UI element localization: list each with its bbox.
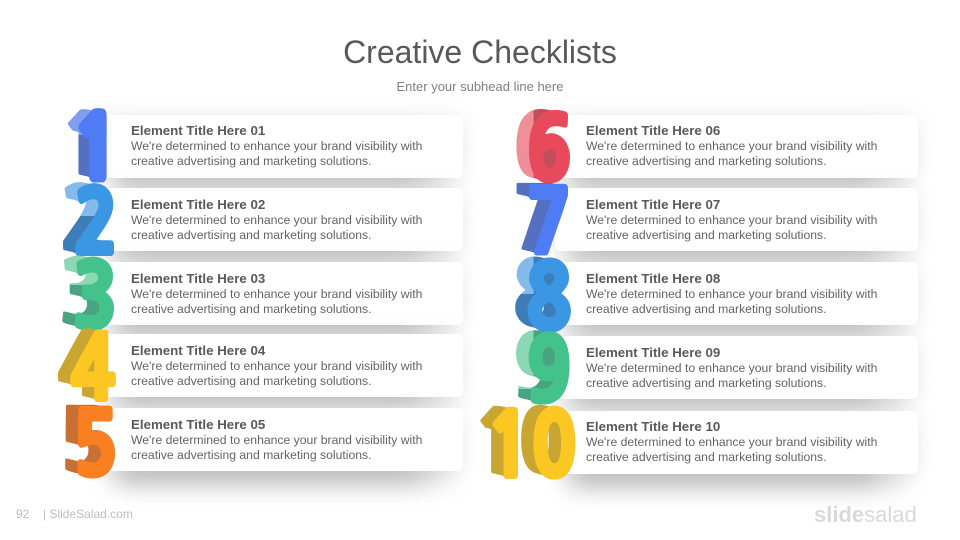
- panel: element 05: creative advertising and marketing solutions.: [131, 448, 372, 462]
- icon: 3D number 8: 8: [527, 255, 571, 341]
- icon: 3D number 7: 7: [527, 180, 571, 266]
- panel: element 01: Element Title Here 01: [131, 123, 265, 138]
- icon: 3D number 4: 4: [71, 326, 115, 412]
- panel: element 08: [555, 262, 918, 325]
- panel: element 03: [100, 262, 463, 325]
- panel: element 02: We're determined to enhance your brand visibility with: [131, 213, 422, 227]
- title: Creative Checklists: [343, 34, 617, 70]
- icon: 3D number 9: 9: [527, 328, 571, 414]
- icon: 3D number 10: 10: [487, 403, 576, 489]
- panel: element 09: [555, 336, 918, 399]
- footer site name: | SlideSalad.com: [43, 507, 133, 521]
- panel: element 01: [100, 115, 463, 178]
- panel: element 06: We're determined to enhance your brand visibility with: [586, 139, 877, 153]
- panel: element 01: We're determined to enhance your brand visibility with: [131, 139, 422, 153]
- panel: element 02: creative advertising and marketing solutions.: [131, 228, 372, 242]
- panel: element 04: We're determined to enhance your brand visibility with: [131, 359, 422, 373]
- panel: element 03: Element Title Here 03: [131, 271, 265, 286]
- icon: 3D number 5: 5: [73, 402, 117, 488]
- panel: element 02: [100, 188, 463, 251]
- panel: element 05: Element Title Here 05: [131, 417, 265, 432]
- panel: element 08: Element Title Here 08: [586, 271, 720, 286]
- subhead: Enter your subhead line here: [397, 79, 563, 94]
- panel: element 09: Element Title Here 09: [586, 345, 720, 360]
- panel: element 09: creative advertising and marketing solutions.: [586, 376, 826, 390]
- icon: 3D number 5: 5: [73, 402, 117, 488]
- icon: 3D number 2: 2: [74, 180, 118, 266]
- panel: element 09: We're determined to enhance your brand visibility with: [586, 361, 877, 375]
- panel: element 05: [100, 408, 463, 471]
- icon: 3D number 1: 1: [75, 107, 118, 191]
- page number: 92: [16, 507, 29, 521]
- icon: 3D number 1: 1: [75, 107, 118, 191]
- icon: 3D number 9: 9: [527, 328, 571, 414]
- icon: 3D number 2: 2: [74, 180, 118, 266]
- panel: element 03: creative advertising and marketing solutions.: [131, 302, 372, 316]
- icon: 3D number 7: 7: [527, 180, 571, 266]
- panel: element 02: Element Title Here 02: [131, 197, 265, 212]
- icon: 3D number 3: 3: [73, 254, 117, 340]
- panel: element 07: creative advertising and marketing solutions.: [586, 228, 826, 242]
- icon: 3D number 3: 3: [73, 254, 117, 340]
- panel: element 03: We're determined to enhance your brand visibility with: [131, 287, 422, 301]
- panel: element 06: Element Title Here 06: [586, 123, 720, 138]
- icon: 3D number 6: 6: [527, 107, 571, 193]
- panel: element 10: Element Title Here 10: [586, 419, 720, 434]
- icon: 3D number 6: 6: [527, 107, 571, 193]
- icon: 3D number 10: 10: [487, 403, 576, 489]
- panel: element 07: We're determined to enhance your brand visibility with: [586, 213, 877, 227]
- icon: 3D number 1: 1: [75, 107, 118, 191]
- panel: element 06: creative advertising and marketing solutions.: [586, 154, 826, 168]
- panel: element 04: [100, 334, 463, 397]
- panel: element 04: creative advertising and marketing solutions.: [131, 374, 372, 388]
- panel: element 08: We're determined to enhance your brand visibility with: [586, 287, 877, 301]
- icon: 3D number 8: 8: [527, 255, 571, 341]
- icon: 3D number 2: 2: [74, 180, 118, 266]
- panel: element 10: We're determined to enhance your brand visibility with: [586, 435, 877, 449]
- panel: element 07: Element Title Here 07: [586, 197, 720, 212]
- panel: element 10: [555, 411, 918, 474]
- icon: 3D number 6: 6: [527, 107, 571, 193]
- panel: element 10: creative advertising and marketing solutions.: [586, 450, 826, 464]
- icon: 3D number 8: 8: [527, 255, 571, 341]
- icon: 3D number 9: 9: [527, 328, 571, 414]
- panel: element 05: We're determined to enhance your brand visibility with: [131, 433, 422, 447]
- icon: 3D number 3: 3: [73, 254, 117, 340]
- panel: element 07: [555, 188, 918, 251]
- panel: element 01: creative advertising and marketing solutions.: [131, 154, 372, 168]
- panel: element 08: creative advertising and marketing solutions.: [586, 302, 826, 316]
- panel: element 06: [555, 115, 918, 178]
- logo: slidesalad: [814, 502, 917, 527]
- panel: element 04: Element Title Here 04: [131, 343, 265, 358]
- icon: 3D number 4: 4: [71, 326, 115, 412]
